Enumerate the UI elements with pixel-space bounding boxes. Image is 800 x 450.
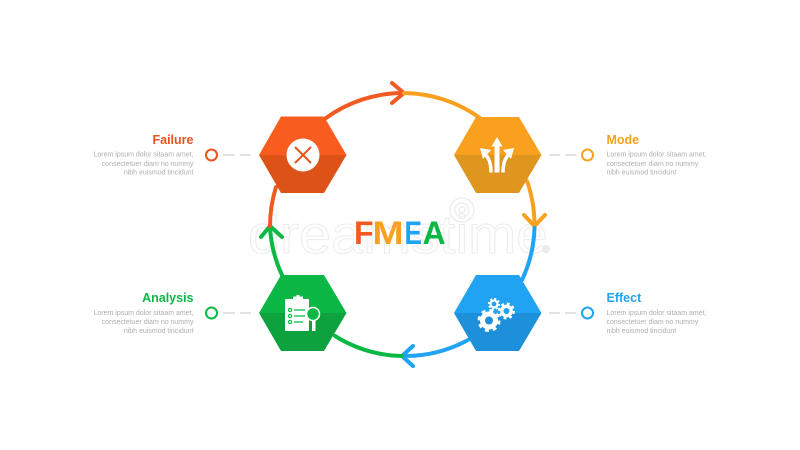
watermark: dreamstime (248, 205, 548, 265)
arc: green to analysis (335, 336, 402, 356)
arc: analysis to failure, green (261, 226, 282, 275)
connector: failure (206, 150, 251, 160)
arc: red to failure (270, 187, 276, 226)
title: FMEA: E (404, 215, 422, 251)
title: FMEA: M (372, 215, 404, 251)
label: mode: nibh euismod tincidunt (606, 170, 676, 176)
label: analysis: Analysis (142, 291, 194, 305)
label: mode (606, 133, 707, 176)
hexagon: analysis (259, 275, 346, 351)
arc: mode to effect, amber (524, 181, 545, 226)
label: mode: consectetuer diam no nummy (606, 161, 699, 168)
title: FMEA (354, 215, 446, 251)
label: mode: Lorem ipsum dolor sitaam amet, (606, 152, 707, 158)
label: effect: Effect (606, 291, 642, 305)
label: failure: nibh euismod tincidunt (124, 170, 194, 176)
label: effect: nibh euismod tincidunt (606, 328, 676, 335)
cycle arcs and arrows (261, 83, 545, 366)
arc: blue to effect (522, 228, 534, 280)
label: analysis (94, 291, 194, 335)
arc: failure to mode, orange (326, 83, 404, 118)
icon: x in circle (286, 138, 320, 172)
icon: clipboard and magnifier (285, 295, 320, 331)
icon: gears (479, 299, 514, 330)
arc: effect to analysis, blue (402, 340, 468, 366)
label: failure: Failure (152, 133, 194, 147)
connector: effect (549, 308, 593, 318)
label: failure: Lorem ipsum dolor sitaam amet, (94, 152, 194, 158)
icon: diverging arrows (480, 137, 514, 172)
label: effect: consectetuer diam no nummy (606, 319, 699, 326)
hexagon: failure (259, 116, 346, 193)
label: effect (606, 291, 707, 335)
label: analysis: Lorem ipsum dolor sitaam amet, (94, 310, 194, 317)
label: analysis: consectetuer diam no nummy (102, 319, 194, 326)
label: failure: consectetuer diam no nummy (102, 161, 194, 168)
hexagon: mode (454, 117, 542, 193)
title: FMEA: A (422, 215, 446, 251)
label: failure (94, 133, 194, 176)
label: analysis: nibh euismod tincidunt (124, 328, 194, 335)
label: effect: Lorem ipsum dolor sitaam amet, (606, 310, 707, 317)
arc: amber to mode (404, 93, 480, 118)
label: mode: Mode (606, 133, 639, 147)
connector: analysis (206, 308, 251, 318)
title: FMEA: F (354, 215, 374, 251)
hexagon: effect (454, 275, 542, 351)
connector: mode (549, 150, 593, 160)
